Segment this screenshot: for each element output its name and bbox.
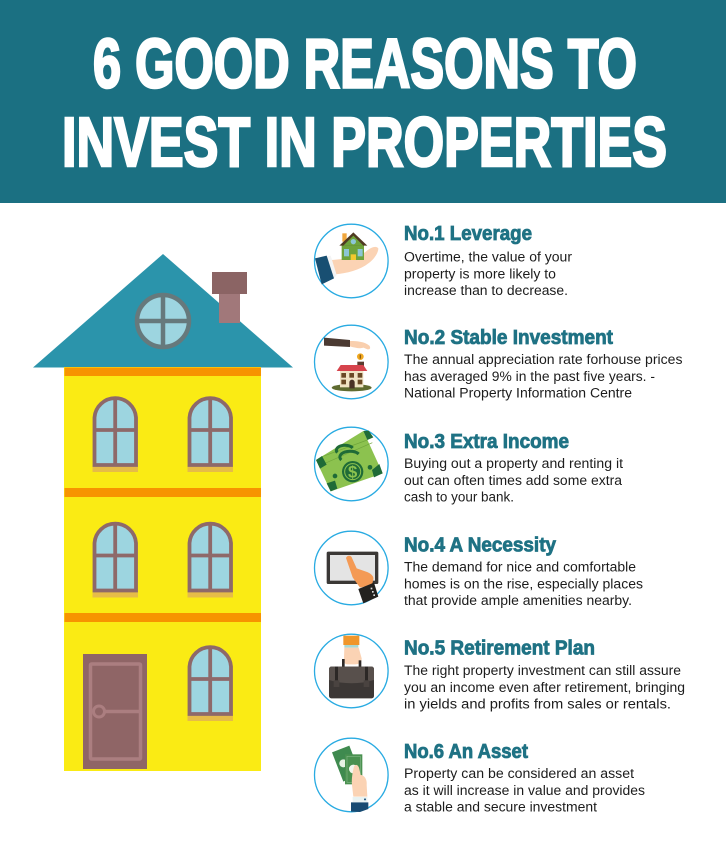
description: Buying out a property and renting it [404,456,623,471]
chimney [212,272,247,294]
description: increase than to decrease. [404,283,568,298]
description [404,352,683,400]
reason 5: retirement plan [314,634,685,712]
description: as it will increase in value and provides [404,783,645,798]
description: has averaged 9% in the past five years. - [404,369,655,384]
reason 3: extra income [314,427,623,504]
description: out can often times add some extra [404,473,622,488]
description: Property can be considered an asset [404,766,634,781]
heading: No.1 Leverage [404,223,532,245]
description [404,456,623,504]
icon: hand holding banknotes [314,738,388,812]
reason 6: an asset [314,738,645,814]
title banner [0,0,726,203]
reason 2: stable investment [314,325,683,400]
roof [33,254,293,368]
description [404,250,573,298]
illustration: yellow house [33,254,293,771]
icon: hand holding briefcase [314,634,388,708]
chimney stack [219,294,240,323]
icon: banknotes [314,427,388,501]
floor bands [64,368,261,622]
description: in yields and profits from sales or rentals. [404,696,671,712]
window row 2 right [188,522,233,598]
heading: No.4 A Necessity [404,534,557,556]
icon: hand dropping coin into house [314,325,388,399]
description [404,766,645,814]
heading: No.6 An Asset [404,741,528,763]
description [404,663,685,712]
heading: No.5 Retirement Plan [404,638,595,660]
window row 1 right [188,397,233,472]
heading: No.2 Stable Investment [404,327,613,349]
description: a stable and secure investment [404,800,597,814]
description: Overtime, the value of your [404,250,573,265]
description [404,560,643,608]
description: property is more likely to [404,266,556,282]
reason 4: a necessity [314,531,643,608]
description: cash to your bank. [404,490,514,504]
icon: finger on tablet [314,531,388,605]
icon: banknotes: $ [348,463,358,482]
icon: hand holding house [314,224,388,298]
description: that provide ample amenities nearby. [404,593,632,608]
window row 3 right [188,646,233,721]
description: The demand for nice and comfortable [404,560,636,574]
door [83,654,147,769]
description: homes is on the rise, especially places [404,576,643,592]
description: The annual appreciation rate forhouse prices [404,352,683,367]
description: National Property Information Centre [404,386,632,400]
description: The right property investment can still assure [404,663,681,678]
window row 1 left [92,397,138,472]
description: you an income even after retirement, bringing [404,680,685,695]
reason 1: leverage [314,223,573,298]
round attic window [137,295,189,347]
heading: No.3 Extra Income [404,431,569,453]
window row 2 left [92,522,138,598]
house wall [64,367,261,771]
